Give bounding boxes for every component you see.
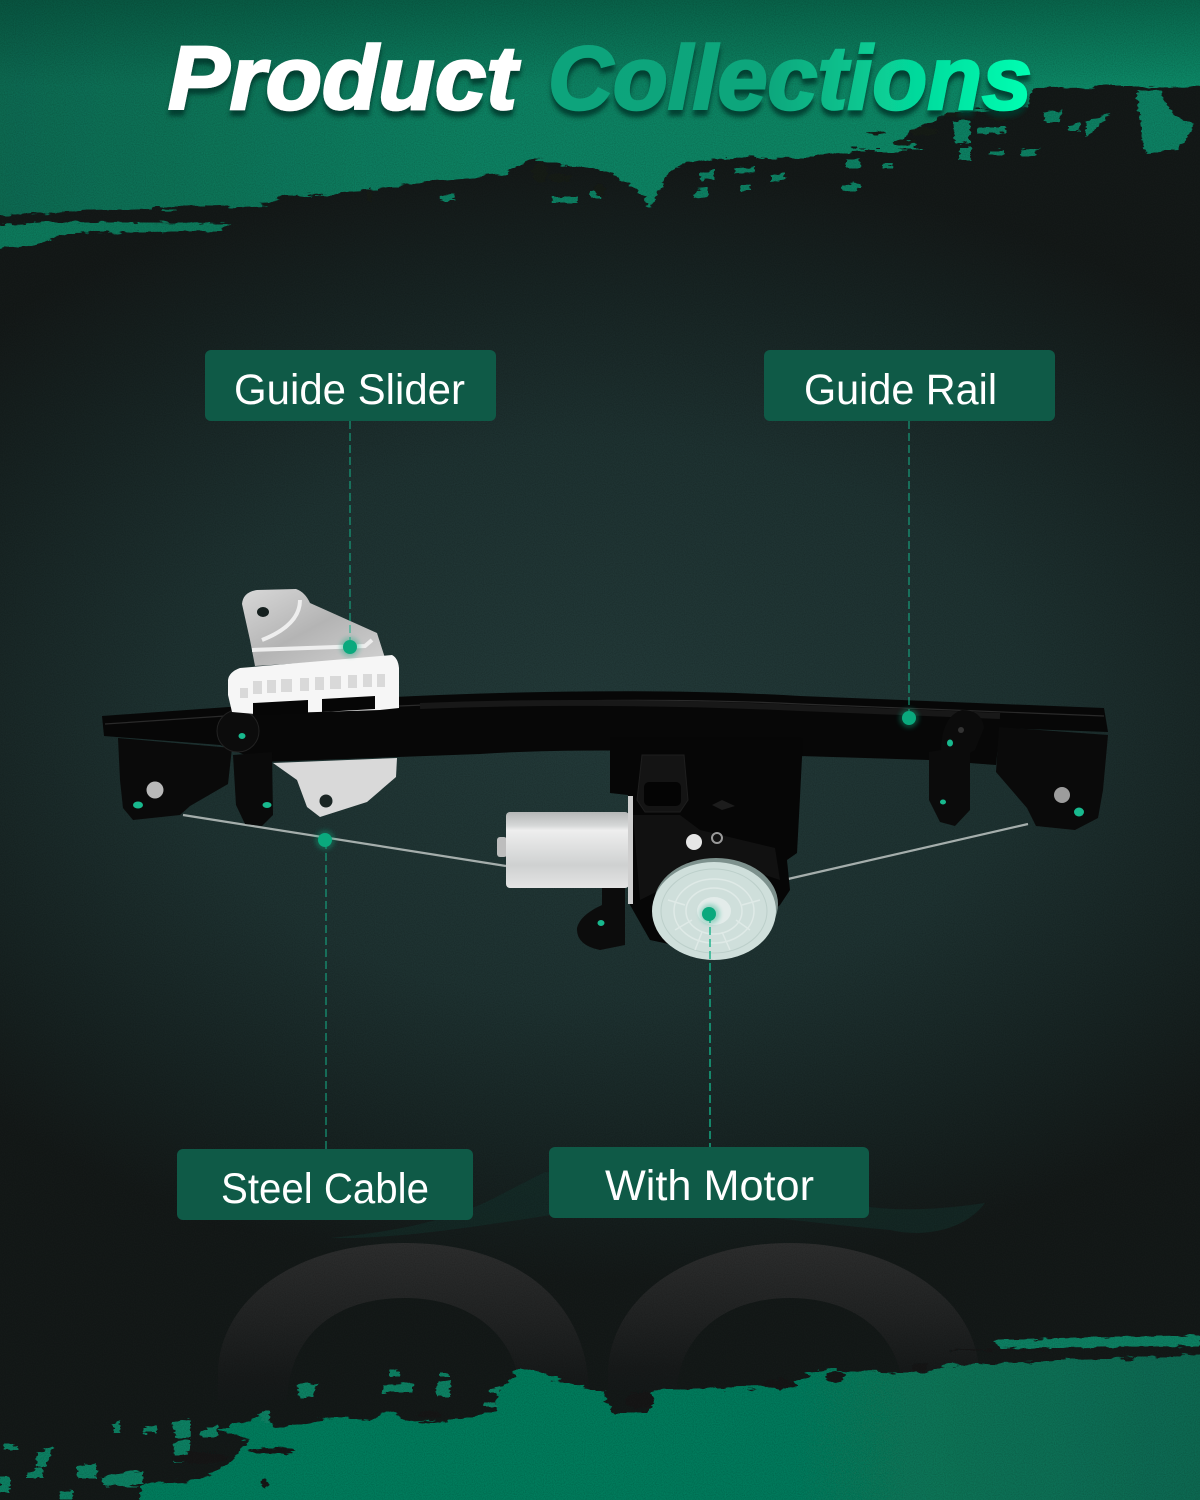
white guide slider	[228, 655, 399, 715]
label: Steel Cable: Steel Cable	[221, 1165, 429, 1213]
marker: Guide Rail	[899, 708, 919, 728]
left clip lobe	[217, 710, 273, 826]
leader line: Steel Cable	[325, 841, 327, 1149]
title: Product	[168, 29, 521, 129]
motor can	[497, 796, 633, 904]
label: Guide Rail: Guide Rail	[804, 366, 997, 414]
left end plate and pivot	[118, 738, 232, 820]
marker: With Motor	[700, 904, 720, 924]
lower silver bracket	[273, 758, 397, 817]
leader line: Guide Slider	[349, 421, 351, 648]
cable: right	[788, 824, 1028, 879]
label: Guide Slider: Guide Slider	[234, 366, 465, 414]
label: Guide Slider	[205, 350, 496, 421]
gear housing details	[633, 800, 780, 900]
window regulator product	[102, 589, 1108, 960]
guide rail	[102, 691, 1108, 765]
motor mounting plate	[610, 737, 803, 955]
label: Guide Rail	[764, 350, 1055, 421]
right clip lobe	[929, 710, 984, 826]
label: Steel Cable	[177, 1149, 473, 1220]
lower mount lobe	[577, 885, 625, 950]
upper silver bracket	[242, 589, 385, 666]
marker: Guide Slider	[340, 637, 360, 657]
decorative wave	[330, 1172, 985, 1238]
leader line: With Motor	[709, 915, 711, 1147]
bottom green brush band	[0, 1335, 1200, 1500]
label: With Motor	[549, 1147, 869, 1218]
top green brush band	[0, 0, 1200, 250]
leader line: Guide Rail	[908, 421, 910, 718]
cable: left	[183, 815, 506, 866]
right end plate and pivot	[996, 727, 1108, 830]
marker: Steel Cable	[315, 830, 335, 850]
label: With Motor: With Motor	[605, 1162, 814, 1210]
plastic gear cover	[652, 858, 778, 960]
decorative arcs	[218, 1243, 979, 1400]
title	[168, 29, 1032, 129]
title: Collections	[548, 29, 1032, 129]
electrical connector	[637, 755, 688, 812]
top shading	[0, 0, 1200, 86]
